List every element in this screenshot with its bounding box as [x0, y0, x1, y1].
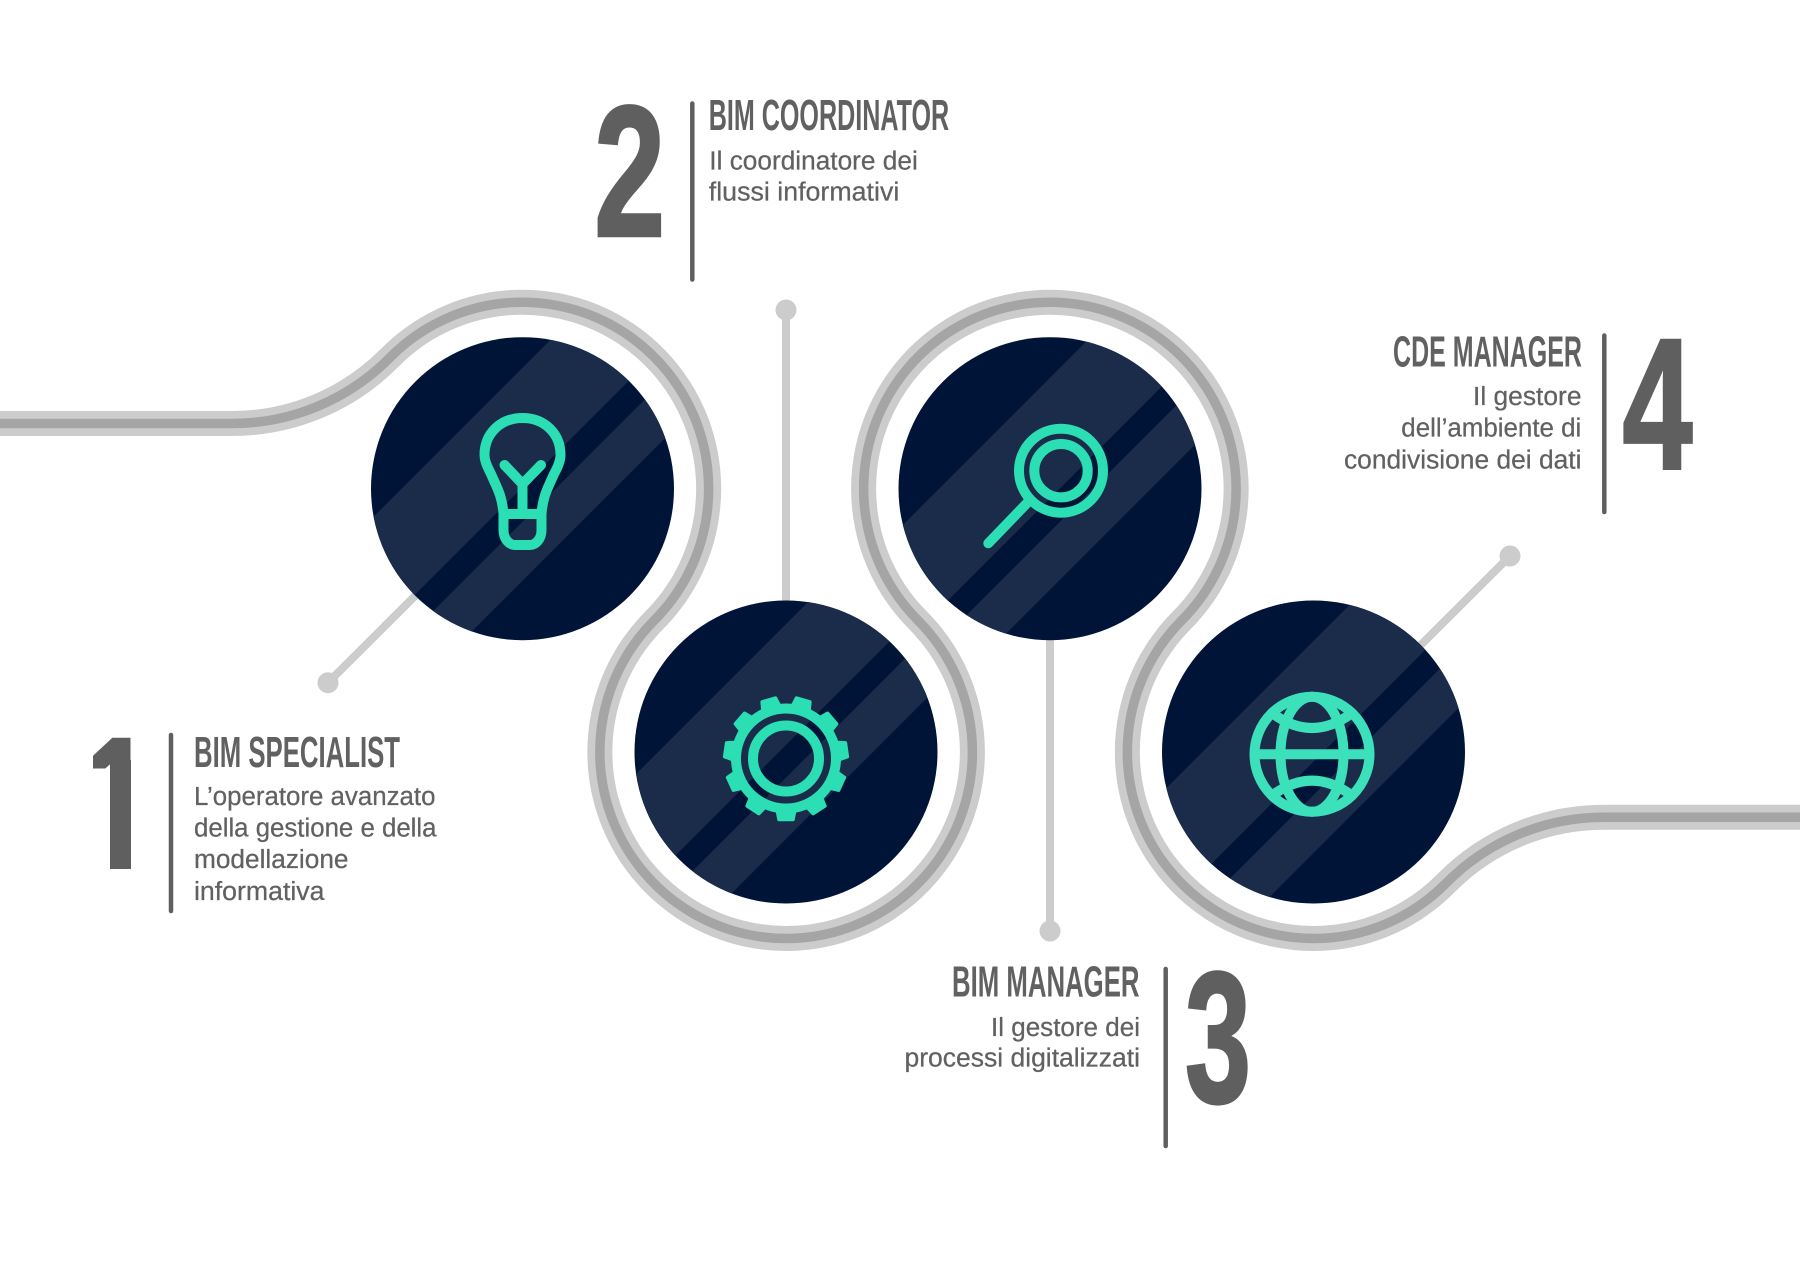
description: modellazione [194, 846, 348, 874]
description: Il coordinatore dei [709, 147, 918, 175]
description: informativa [194, 878, 325, 906]
description: dell’ambiente di [1401, 415, 1581, 443]
divider [169, 735, 173, 911]
icon: light bulb [484, 418, 560, 545]
heading: CDE MANAGER [1393, 328, 1582, 377]
icon: magnifying glass [988, 429, 1103, 543]
text block 3: BIM Manager [904, 933, 1251, 1146]
description: condivisione dei dati [1344, 446, 1582, 474]
connector 3 with dot [1040, 489, 1060, 942]
connector 2 with dot [776, 300, 796, 752]
description [709, 147, 918, 207]
icon: gear [724, 697, 848, 820]
text block 2: BIM Coordinator [594, 67, 949, 280]
description [194, 783, 437, 906]
description: L’operatore avanzato [194, 783, 436, 811]
description: Il gestore dei [991, 1014, 1140, 1042]
description: processi digitalizzati [904, 1045, 1140, 1073]
description [904, 1014, 1140, 1073]
icon: globe [1254, 697, 1370, 812]
text block 4: CDE Manager [1344, 300, 1692, 512]
number 2: 2 [594, 67, 665, 276]
divider [1602, 336, 1607, 512]
winding road path [0, 302, 1800, 938]
number 1 [93, 738, 131, 869]
circle 2 with stripes [634, 600, 938, 904]
number 1: 1 [82, 698, 154, 908]
description: Il gestore [1473, 383, 1582, 411]
connector 1 with dot [318, 489, 522, 693]
divider [1163, 969, 1168, 1146]
heading: BIM COORDINATOR [709, 91, 949, 140]
heading: BIM MANAGER [952, 958, 1140, 1007]
description [1344, 383, 1582, 474]
connector 4 with dot [1314, 546, 1520, 752]
heading: BIM SPECIALIST [194, 728, 400, 777]
description: della gestione e della [194, 815, 437, 843]
circle 3 with stripes [898, 337, 1202, 640]
number 4: 4 [1622, 300, 1692, 508]
number 3: 3 [1185, 933, 1251, 1142]
text block 1: BIM Specialist [93, 732, 437, 914]
description: flussi informativi [709, 179, 899, 207]
divider [690, 104, 695, 280]
circle 1 with stripes [371, 337, 674, 640]
circle 4 with stripes [1162, 600, 1465, 904]
